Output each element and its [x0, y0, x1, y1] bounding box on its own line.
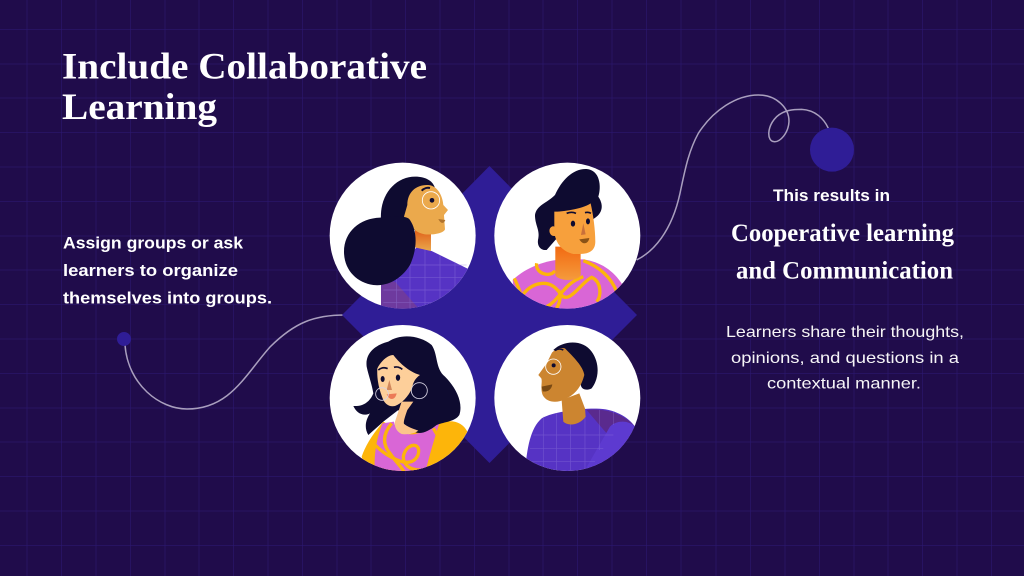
left text block: themselves into groups. — [63, 288, 272, 308]
title — [62, 46, 427, 128]
neck — [415, 230, 431, 251]
connector: right curve with dot — [637, 95, 854, 260]
hair bun — [344, 216, 416, 285]
portrait: man with quiff, top right — [494, 163, 640, 313]
face — [404, 185, 448, 234]
hair — [553, 342, 598, 390]
heading: cooperative learning: and Communication — [736, 258, 953, 284]
description text: Learners share their thoughts, — [726, 324, 964, 341]
hair back — [381, 177, 435, 230]
neck — [562, 393, 586, 424]
hair — [535, 169, 602, 250]
face — [377, 355, 420, 406]
hair — [353, 336, 460, 435]
description text: contextual manner. — [767, 376, 921, 392]
shirt — [381, 248, 468, 308]
heading: cooperative learning: Cooperative learning — [731, 220, 954, 247]
shirt — [513, 259, 623, 313]
neck — [555, 247, 581, 280]
left text block: Assign groups or ask — [63, 234, 244, 252]
portrait: woman with long hair, bottom left — [330, 325, 476, 473]
central diamond — [342, 166, 637, 463]
heading: cooperative learning — [731, 220, 954, 284]
head — [538, 348, 584, 402]
right text block: results: This results in — [773, 187, 890, 205]
portrait: man in profile, bottom right — [494, 325, 640, 473]
description text: opinions, and questions in a — [731, 350, 959, 367]
earrings — [376, 388, 388, 400]
shirt — [525, 409, 635, 473]
title: Learning — [62, 87, 218, 128]
left text block — [63, 234, 272, 308]
connector: left curve with dot — [117, 315, 345, 409]
shirt and sleeves — [362, 421, 467, 473]
neck — [395, 402, 418, 434]
face — [549, 203, 595, 254]
right text block: results — [731, 187, 954, 284]
left text block: learners to organize — [63, 261, 238, 280]
description text — [726, 324, 964, 392]
portrait: woman with hair bun, top left — [330, 163, 476, 317]
title: Include Collaborative — [62, 46, 427, 88]
